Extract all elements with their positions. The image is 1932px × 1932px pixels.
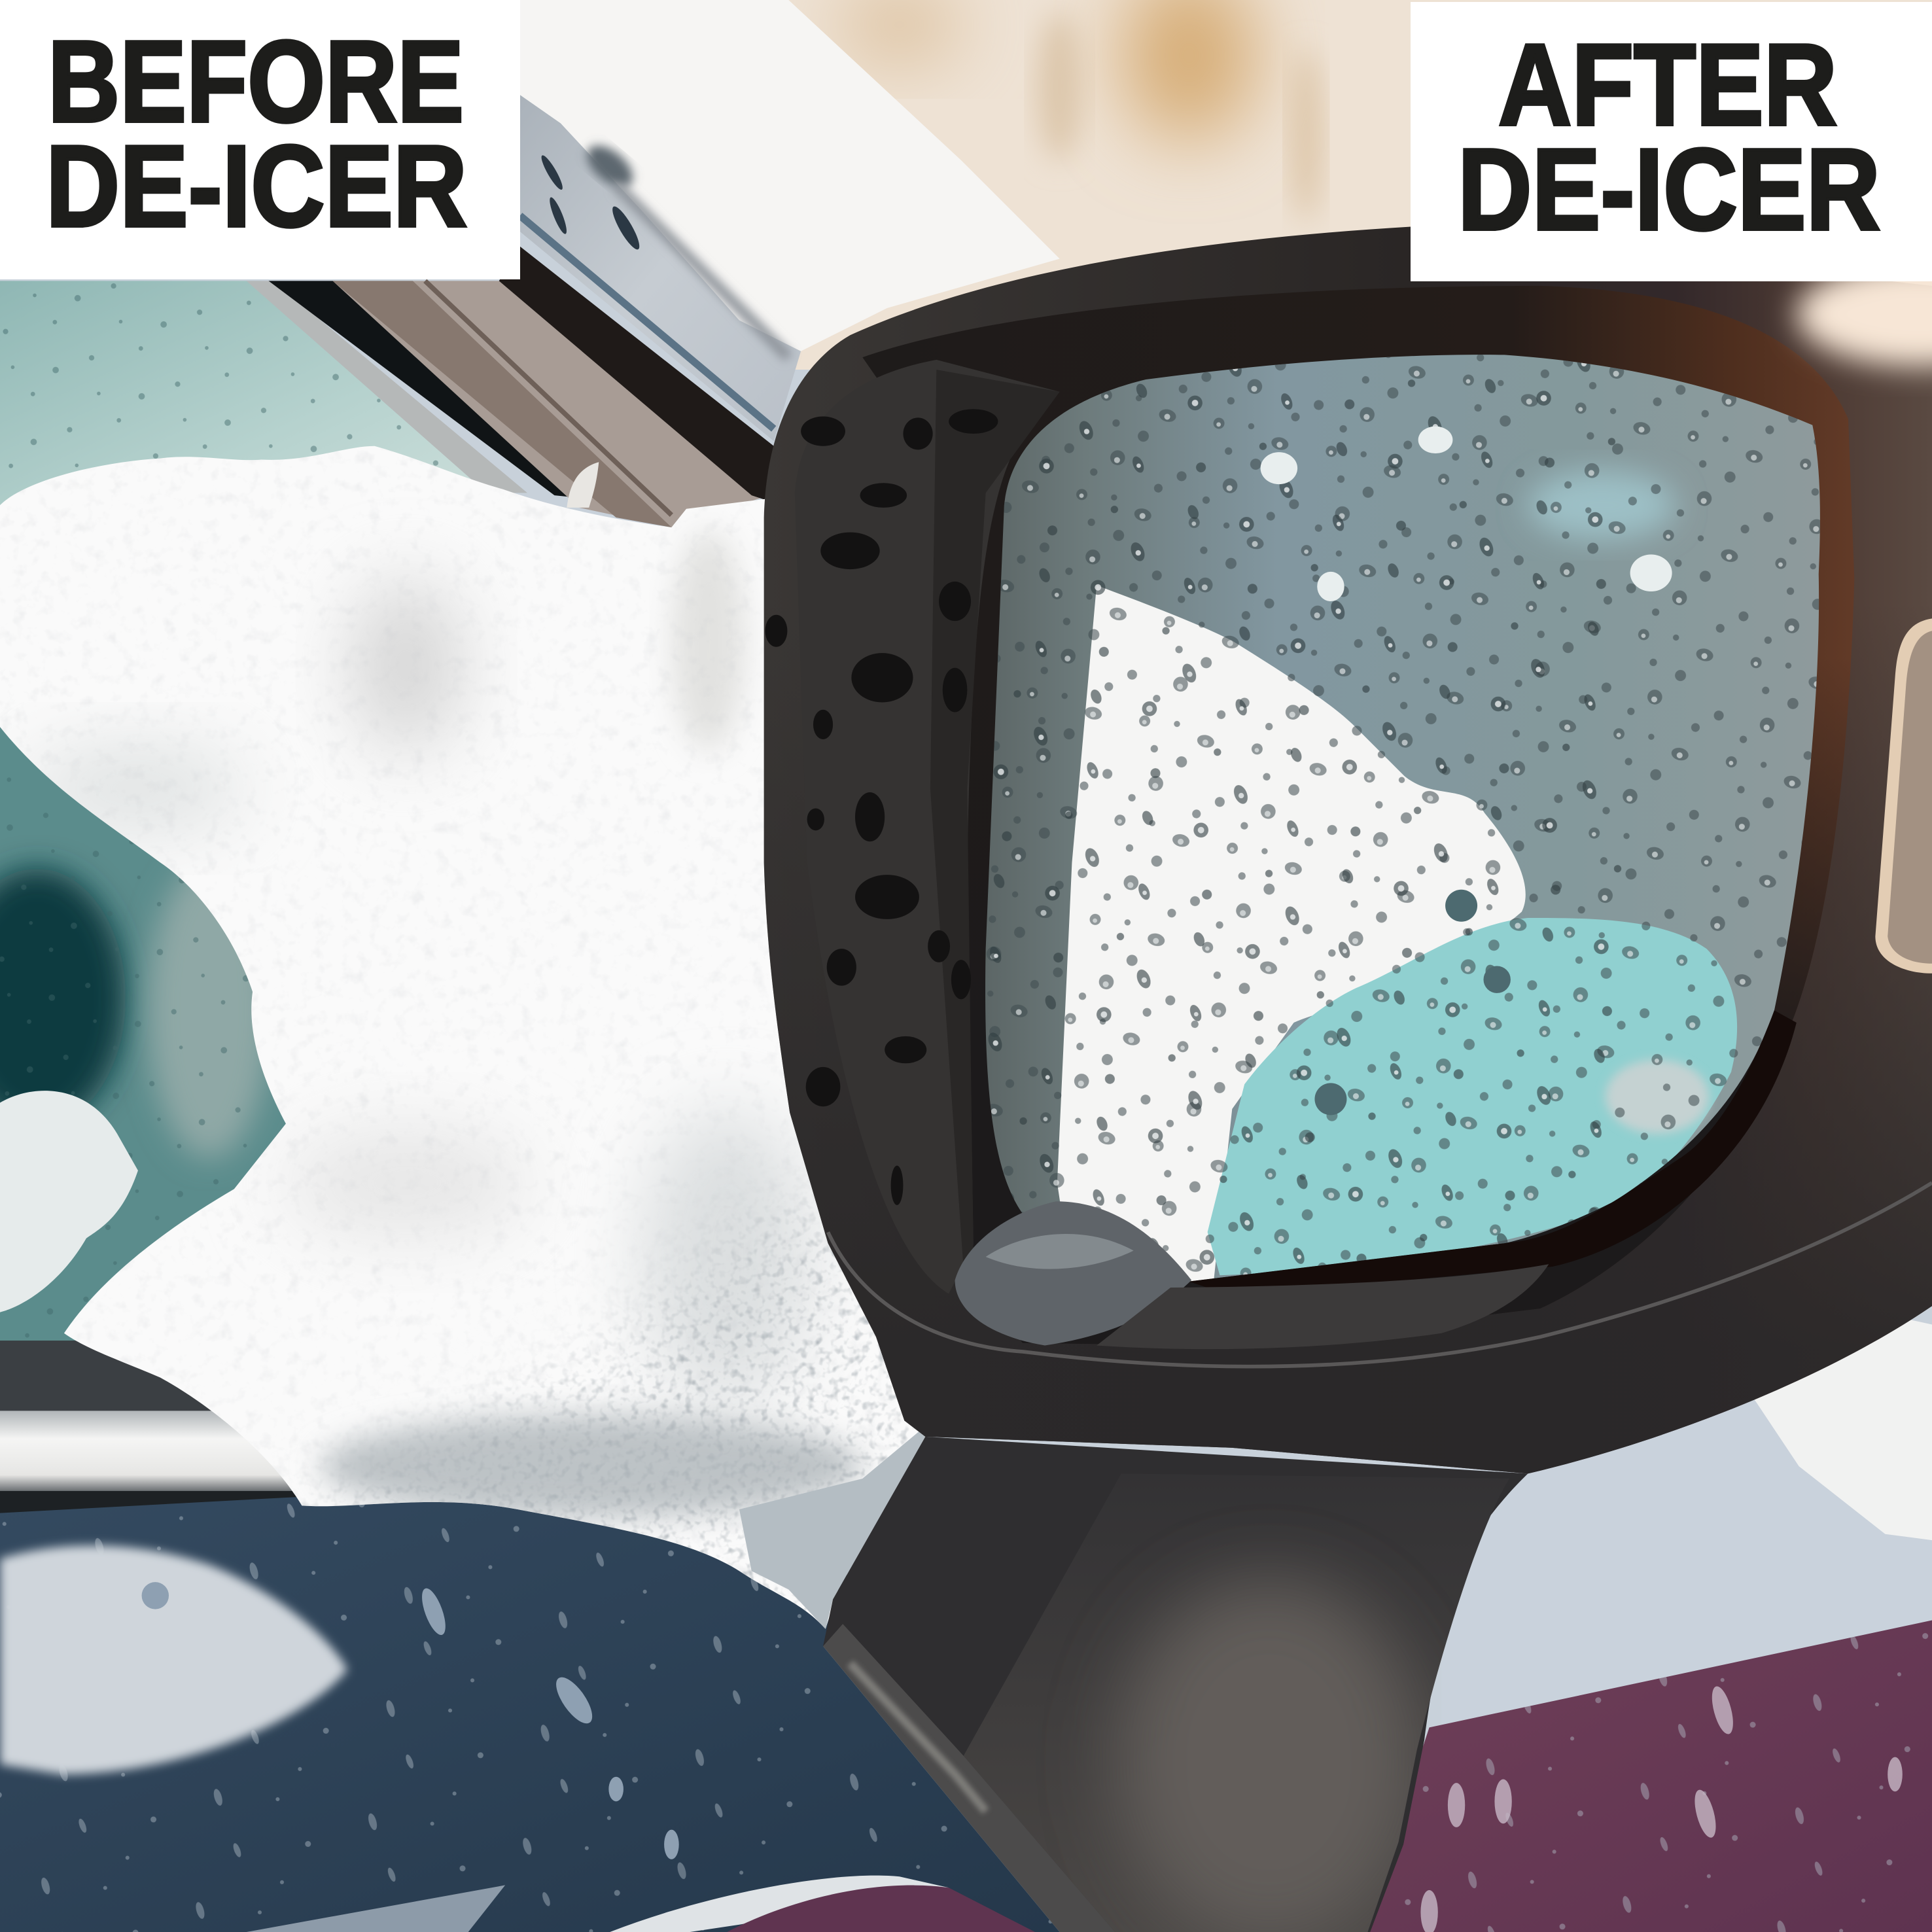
- mirror stalk: [823, 1437, 1528, 1932]
- heading: after de-icer: DE-ICER: [1458, 124, 1880, 254]
- reflection: snow fleck: [1606, 1060, 1709, 1134]
- white stripe reflection: [610, 1876, 949, 1932]
- door reflection: [0, 1545, 347, 1774]
- lower window with dark reflection: [0, 714, 308, 1356]
- side turn indicator: [1875, 618, 1932, 974]
- silver trim: [520, 95, 801, 441]
- label panel: before de-icer: [0, 0, 520, 279]
- snow lump: [0, 1091, 138, 1312]
- stalk main facet: [964, 1473, 1509, 1932]
- heading: before de-icer: [46, 17, 467, 251]
- reflection: snow: [1057, 586, 1526, 1282]
- door trim: [0, 1341, 321, 1515]
- snow patch: [1749, 1306, 1932, 1540]
- housing inner rim: [862, 286, 1854, 1346]
- car door: [0, 1491, 1060, 1932]
- black rubber seal: [269, 281, 591, 499]
- reflection: pale sky patch: [1528, 470, 1676, 540]
- label panel: after de-icer: [1411, 2, 1932, 281]
- heading: before de-icer: BEFORE: [48, 17, 464, 147]
- snow on roof: [520, 0, 1060, 357]
- maroon reflection: [727, 1886, 1035, 1932]
- reflection: teal car: [1208, 918, 1737, 1275]
- mirror housing: [764, 227, 1932, 1473]
- base trim strip: [823, 1624, 1115, 1932]
- snow mass over mirror arm: [0, 444, 949, 1651]
- droplet field: [986, 351, 1823, 1288]
- warm glow at top right: [1797, 262, 1932, 366]
- dark channel: [499, 247, 774, 501]
- heading: after de-icer: [1458, 20, 1880, 254]
- dark gap below glass: [1189, 1010, 1797, 1296]
- small snow tuft on trim: [567, 462, 599, 508]
- mirror glass: [985, 351, 1823, 1288]
- lower right snowy ground: [1361, 1306, 1932, 1932]
- brown painted trim: [332, 281, 769, 527]
- window frame and chrome trim: [269, 95, 801, 527]
- heading: before de-icer: DE-ICER: [46, 122, 467, 251]
- ice chunk and slush at mirror base: [955, 1201, 1549, 1349]
- upper side window: [0, 281, 527, 518]
- housing water drops: [765, 409, 998, 1205]
- rim highlight line: [828, 1183, 1932, 1367]
- housing left face: [795, 360, 1060, 1293]
- maroon car body: [1361, 1621, 1932, 1932]
- heading: after de-icer: AFTER: [1498, 20, 1837, 149]
- clear ice drip: [739, 1417, 936, 1629]
